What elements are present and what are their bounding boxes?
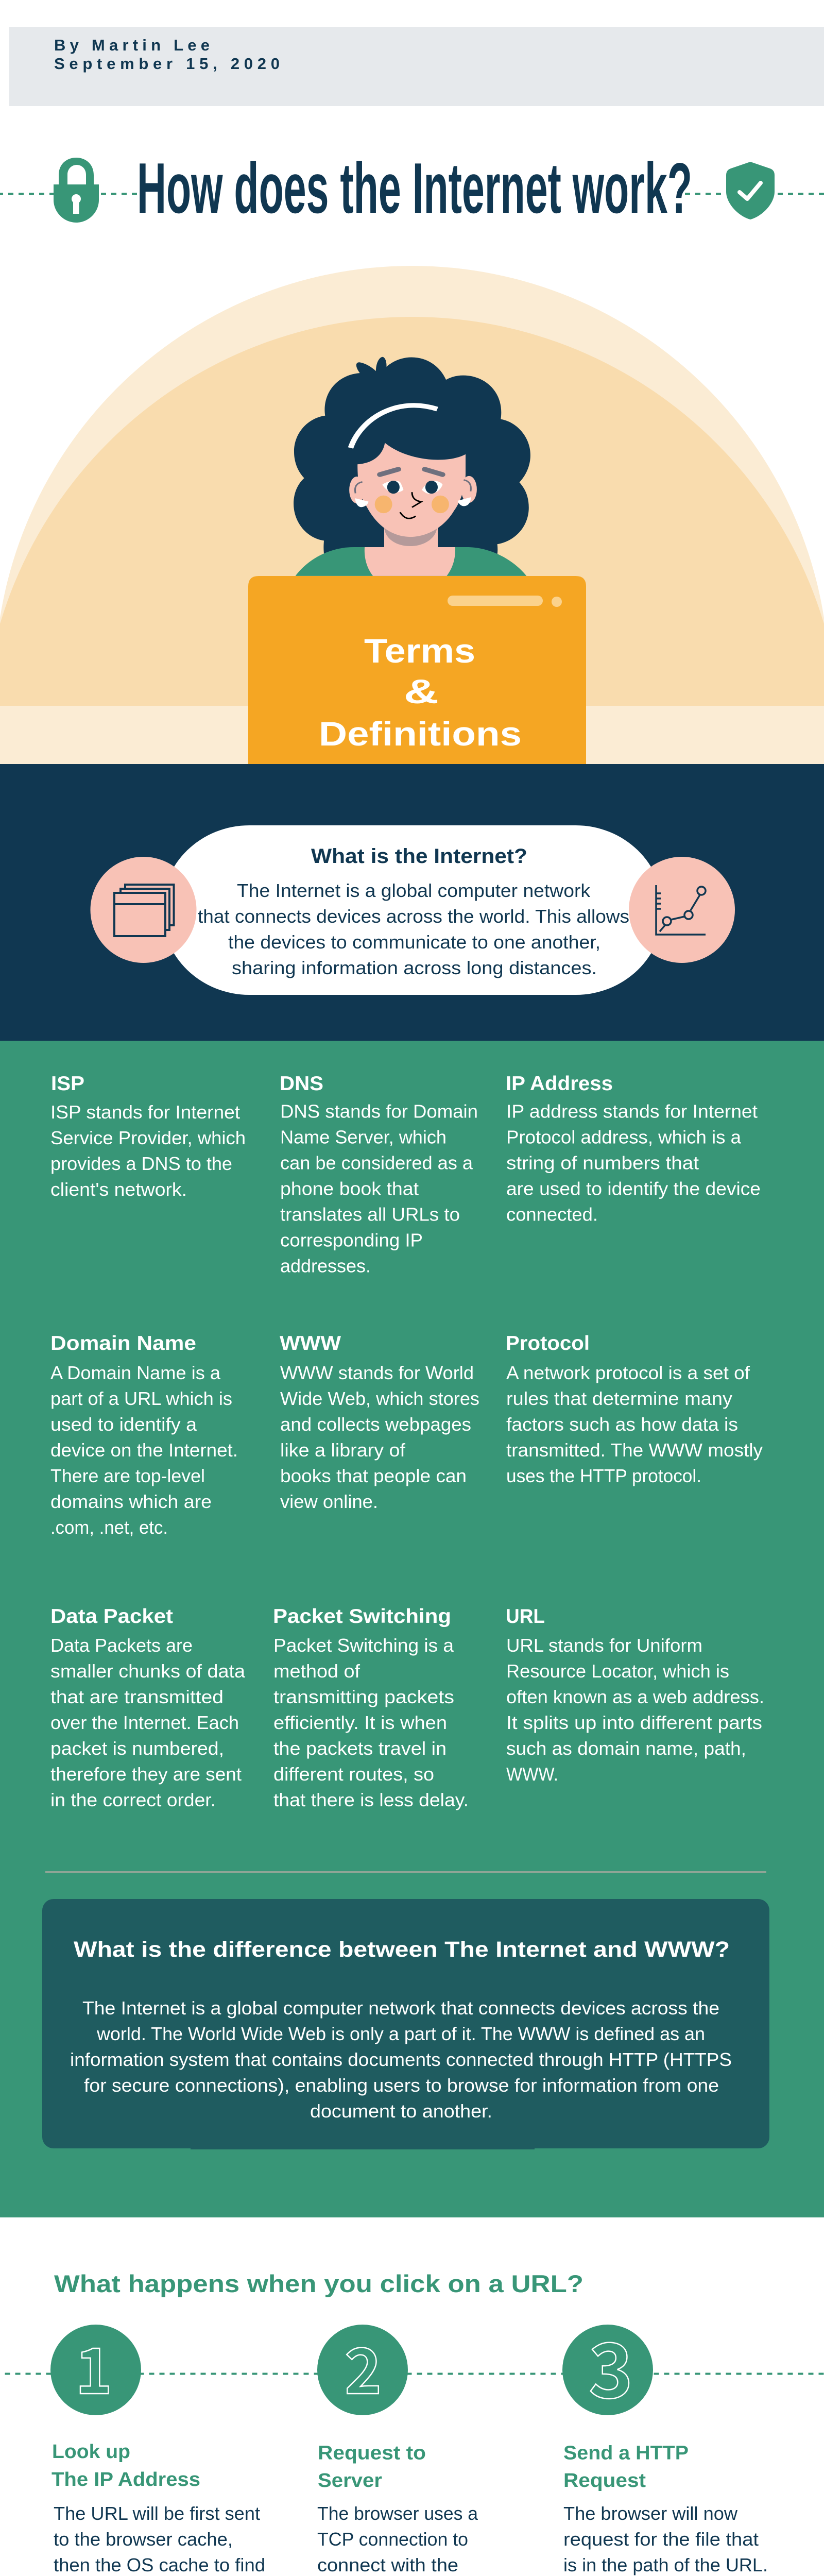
term: ISP xyxy=(50,1073,246,1200)
term: Protocol: factors such as how data is xyxy=(506,1414,738,1435)
term: DNS: DNS stands for Domain xyxy=(280,1100,478,1122)
cheeks xyxy=(375,496,449,513)
term: Protocol: Protocol xyxy=(506,1332,590,1354)
term: WWW: WWW xyxy=(280,1332,341,1354)
term: WWW: WWW stands for World xyxy=(280,1362,474,1383)
term: Data Packet: over the Internet. Each xyxy=(50,1712,239,1733)
term: Packet Switching xyxy=(273,1605,469,1810)
neck xyxy=(384,524,438,547)
body xyxy=(70,1997,732,2122)
term: Protocol: transmitted. The WWW mostly xyxy=(506,1439,763,1461)
term: DNS: can be considered as a xyxy=(280,1152,473,1174)
icon: padlock xyxy=(54,158,99,223)
term: WWW: like a library of xyxy=(280,1439,406,1461)
step 3 body: The browser will now xyxy=(563,2503,738,2524)
step 2 body: connect with the xyxy=(317,2554,458,2575)
term: DNS: addresses. xyxy=(280,1255,371,1277)
term: URL: URL xyxy=(506,1605,545,1628)
term: DNS: DNS xyxy=(280,1073,323,1095)
term: Packet Switching: method of xyxy=(273,1660,360,1682)
term: Domain Name: Domain Name xyxy=(50,1332,196,1354)
term: Domain Name: domains which are xyxy=(50,1491,212,1512)
term: IP Address: IP Address xyxy=(506,1073,613,1095)
step 3 text xyxy=(563,2442,768,2576)
step 1 body: then the OS cache to find xyxy=(54,2554,265,2575)
icon: line chart xyxy=(629,857,735,963)
term: ISP: ISP xyxy=(51,1073,84,1095)
earrings xyxy=(355,497,471,507)
panel: internet vs www xyxy=(42,1899,769,2149)
term: URL: URL stands for Uniform xyxy=(506,1635,702,1656)
term: Packet Switching: efficiently. It is when xyxy=(273,1712,447,1733)
term: WWW: Wide Web, which stores xyxy=(280,1388,479,1409)
step 3 body xyxy=(563,2503,768,2576)
term: ISP: client's network. xyxy=(50,1179,187,1200)
navy section: what is the internet xyxy=(0,764,824,1041)
hero background hills xyxy=(0,266,824,764)
step badge 2 xyxy=(317,2321,408,2415)
step 3 heading xyxy=(563,2442,689,2492)
byline banner: By Martin Lee xyxy=(54,36,210,54)
step 2 body: TCP connection to xyxy=(317,2529,468,2550)
term: WWW: and collects webpages xyxy=(280,1414,471,1435)
term: IP Address: IP address stands for Internet xyxy=(506,1100,758,1122)
term: Domain Name: part of a URL which is xyxy=(50,1388,232,1409)
white pill xyxy=(162,825,663,995)
term: Protocol: A network protocol is a set of xyxy=(506,1362,750,1383)
hair xyxy=(294,357,530,556)
term: IP Address: connected. xyxy=(506,1204,598,1225)
term: Protocol: rules that determine many xyxy=(506,1388,732,1409)
term: Data Packet: Data Packet xyxy=(50,1605,173,1628)
icon: stacked windows xyxy=(91,857,197,963)
term: DNS: corresponding IP xyxy=(280,1229,423,1251)
term: URL: It splits up into different parts xyxy=(506,1712,762,1733)
nose and mouth xyxy=(400,492,421,518)
term: IP Address: are used to identify the device xyxy=(506,1178,761,1199)
term: WWW: books that people can xyxy=(280,1465,467,1486)
step 2 heading: Server xyxy=(318,2470,382,2492)
step 2 heading: Request to xyxy=(318,2442,426,2464)
neck shadow xyxy=(384,528,437,546)
shirt xyxy=(296,547,526,576)
step 1 heading: Look up xyxy=(52,2441,130,2463)
headband xyxy=(351,405,437,448)
term: Data Packet: in the correct order. xyxy=(50,1789,216,1810)
step 1 heading: The IP Address xyxy=(52,2469,200,2490)
term: ISP: Service Provider, which xyxy=(50,1127,246,1148)
term: Data Packet: smaller chunks of data xyxy=(50,1660,246,1682)
term: URL: WWW. xyxy=(506,1764,558,1785)
term: Data Packet xyxy=(50,1605,246,1810)
term: Domain Name: device on the Internet. xyxy=(50,1439,238,1461)
term: ISP: provides a DNS to the xyxy=(50,1153,232,1174)
body: information system that contains documents connected through HTTP (HTTPS xyxy=(70,2049,732,2070)
term: Packet Switching: transmitting packets xyxy=(273,1686,454,1707)
term: IP Address: string of numbers that xyxy=(506,1152,699,1174)
term: URL xyxy=(506,1605,764,1785)
step 1 body xyxy=(54,2503,265,2576)
step timeline xyxy=(5,2311,824,2420)
ear lines xyxy=(355,480,471,493)
term: DNS xyxy=(280,1073,478,1277)
term: Protocol xyxy=(506,1332,763,1486)
face xyxy=(357,443,466,537)
byline banner xyxy=(9,27,824,106)
orange panel: terms and definitions: Definitions xyxy=(319,715,522,753)
term: WWW xyxy=(280,1332,479,1512)
step badge 2: 2 xyxy=(345,2321,382,2412)
orange panel: terms and definitions xyxy=(248,576,586,765)
step 3 body: is in the path of the URL. xyxy=(563,2554,768,2575)
heading: What is the Internet? xyxy=(311,845,527,868)
term: URL: such as domain name, path, xyxy=(506,1738,746,1759)
step 1 body: The URL will be first sent xyxy=(54,2503,260,2524)
description xyxy=(198,880,629,978)
term: DNS: translates all URLs to xyxy=(280,1204,460,1225)
term: Packet Switching: Packet Switching is a xyxy=(273,1635,454,1656)
body: The Internet is a global computer network that connects devices across the xyxy=(82,1997,719,2019)
step badge 3: 3 xyxy=(589,2311,633,2420)
step badge 3 xyxy=(562,2311,653,2420)
eyebrows xyxy=(380,469,442,474)
step badge 1: 1 xyxy=(75,2321,112,2412)
body: for secure connections), enabling users to browse for information from one xyxy=(84,2075,719,2096)
term: URL: often known as a web address. xyxy=(506,1686,764,1707)
orange panel: terms and definitions: Terms xyxy=(364,632,475,670)
term: Domain Name: used to identify a xyxy=(50,1414,197,1435)
term: Packet Switching: the packets travel in xyxy=(273,1738,447,1759)
term: Packet Switching: Packet Switching xyxy=(273,1605,451,1628)
step 3 body: request for the file that xyxy=(563,2529,759,2550)
step 3 heading: Send a HTTP xyxy=(563,2442,689,2464)
term: DNS: Name Server, which xyxy=(280,1126,447,1148)
term: ISP: ISP stands for Internet xyxy=(50,1101,240,1123)
term: Protocol: uses the HTTP protocol. xyxy=(506,1465,701,1486)
step 3 heading: Request xyxy=(563,2470,646,2492)
description: The Internet is a global computer network xyxy=(237,880,591,901)
term: URL: Resource Locator, which is xyxy=(506,1660,729,1682)
heading: What is the difference between The Internet and WWW? xyxy=(74,1937,730,1962)
heading: what happens: What happens when you click on a URL? xyxy=(54,2270,583,2297)
term: Packet Switching: that there is less delay. xyxy=(273,1789,469,1810)
term: Domain Name xyxy=(50,1332,238,1538)
step 1 text xyxy=(52,2441,265,2576)
character illustration xyxy=(294,357,530,576)
term: Data Packet: therefore they are sent xyxy=(50,1764,242,1785)
orange panel: terms and definitions: & xyxy=(404,672,439,710)
eyes xyxy=(382,481,442,494)
step 2 text xyxy=(317,2442,485,2576)
description: that connects devices across the world. This allows xyxy=(198,906,629,927)
term: Domain Name: .com, .net, etc. xyxy=(50,1517,168,1538)
byline banner: September 15, 2020 xyxy=(54,55,280,73)
step 1 body: to the browser cache, xyxy=(54,2529,233,2550)
term: Data Packet: packet is numbered, xyxy=(50,1738,224,1759)
term: Packet Switching: different routes, so xyxy=(273,1764,434,1785)
description: the devices to communicate to one another, xyxy=(228,931,600,953)
term: Domain Name: A Domain Name is a xyxy=(50,1362,221,1383)
ears xyxy=(349,476,477,503)
step 2 body: The browser uses a xyxy=(317,2503,478,2524)
body: document to another. xyxy=(310,2100,492,2122)
term: Data Packet: Data Packets are xyxy=(50,1635,193,1656)
step 2 heading xyxy=(318,2442,426,2492)
term: Data Packet: that are transmitted xyxy=(50,1686,224,1707)
step 2 body xyxy=(317,2503,485,2576)
step badge 1 xyxy=(50,2321,141,2415)
icon: shield with check xyxy=(726,162,775,219)
title row xyxy=(0,148,824,228)
term: IP Address: Protocol address, which is a xyxy=(506,1126,742,1148)
green section: term definitions xyxy=(0,1041,824,2217)
description: sharing information across long distances. xyxy=(232,957,597,978)
body: world. The World Wide Web is only a part of it. The WWW is defined as an xyxy=(96,2023,705,2044)
step 1 heading xyxy=(52,2441,200,2490)
term: DNS: phone book that xyxy=(280,1178,419,1199)
chest xyxy=(365,547,455,576)
term: WWW: view online. xyxy=(280,1491,378,1512)
term: IP Address xyxy=(506,1073,761,1225)
term: Domain Name: There are top-level xyxy=(50,1465,205,1486)
